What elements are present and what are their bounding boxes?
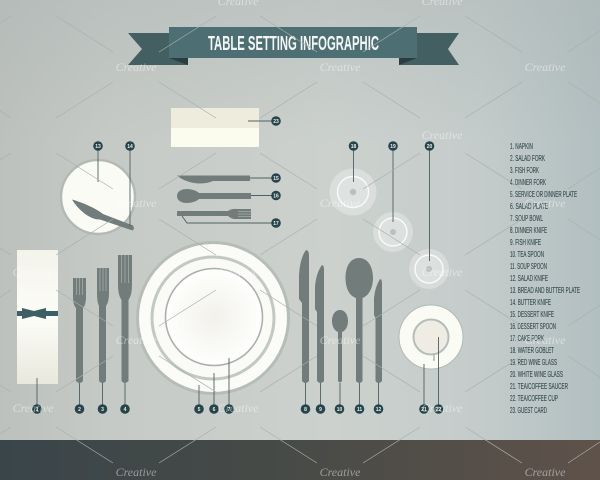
label 7 <box>224 404 234 414</box>
legend list: 10. TEA SPOON <box>510 250 544 259</box>
watermark text: Creative <box>218 401 259 415</box>
dessert cutlery: 16 <box>273 193 279 199</box>
salad fork: 2 <box>78 407 81 413</box>
saucer and cup: 21 <box>421 407 427 413</box>
legend list: 6. SALAD PLATE <box>510 202 548 211</box>
watermark text: Creative <box>320 465 361 479</box>
butter knife leader <box>129 146 131 226</box>
dessert cutlery: 15 <box>273 176 279 182</box>
water goblet <box>330 141 376 216</box>
cup <box>414 320 448 354</box>
cup handle <box>433 354 434 360</box>
label 5 <box>194 404 204 414</box>
watermark text: Creative <box>116 60 157 74</box>
banner main ribbon <box>169 27 417 58</box>
legend list: 8. DINNER KNIFE <box>510 226 547 235</box>
title: TABLE SETTING INFOGRAPHIC <box>208 33 379 55</box>
legend list: 16. DESSERT SPOON <box>510 322 556 331</box>
bread plate <box>61 160 135 234</box>
service plate <box>138 242 288 394</box>
legend list: 19. RED WINE GLASS <box>510 358 557 367</box>
bread and butter plate with butter knife: 14 <box>127 144 133 150</box>
dinner knife: 8 <box>304 407 307 413</box>
fish fork: 3 <box>101 407 104 413</box>
watermark text: Creative <box>116 196 157 210</box>
salad knife: 12 <box>376 407 381 413</box>
plate leaders <box>199 358 229 409</box>
legend list: 11. SOUP SPOON <box>510 262 547 271</box>
cake fork <box>177 209 251 219</box>
white wine glass <box>409 141 449 289</box>
banner folds <box>169 58 417 65</box>
fish knife <box>315 265 325 414</box>
legend list: 2. SALAD FORK <box>510 154 545 163</box>
legend list: 22. TEA/COFFEE CUP <box>510 394 558 403</box>
legend list: 14. BUTTER KNIFE <box>510 298 551 307</box>
title banner <box>128 27 459 65</box>
dessert spoon <box>177 189 251 203</box>
watermark text: Creative <box>218 128 259 142</box>
cup leaders <box>424 337 438 409</box>
watermark text: Creative <box>525 333 566 347</box>
saucer and cup <box>399 305 463 414</box>
watermark text: Creative <box>525 196 566 210</box>
legend list: 9. FISH KNIFE <box>510 238 541 247</box>
watermark text: Creative <box>422 265 463 279</box>
napkin band and bow <box>17 308 58 319</box>
butter knife <box>72 200 134 230</box>
watermark text: Creative <box>320 196 361 210</box>
label 13 <box>93 141 103 151</box>
label 6 <box>209 404 219 414</box>
dinner fork <box>118 255 132 414</box>
saucer <box>399 305 463 369</box>
bread and butter plate with butter knife <box>61 141 135 234</box>
watermark text: Creative <box>320 60 361 74</box>
legend list: 20. WHITE WINE GLASS <box>510 370 563 379</box>
water goblet: 18 <box>351 144 356 150</box>
watermark text: Creative <box>320 333 361 347</box>
bread and butter plate with butter knife: 13 <box>95 144 101 150</box>
legend list: 7. SOUP BOWL <box>510 214 543 223</box>
watermark text: Creative <box>525 465 566 479</box>
watermark text: Creative <box>218 265 259 279</box>
dinner knife <box>299 250 310 414</box>
plate stack: 7 <box>228 407 231 413</box>
red wine glass <box>373 141 413 252</box>
label 22 <box>434 404 443 414</box>
dinner fork: 4 <box>124 407 127 413</box>
watermark text: Creative <box>116 333 157 347</box>
dessert cutlery <box>177 173 281 228</box>
legend list: 18. WATER GOBLET <box>510 346 554 355</box>
soup bowl <box>166 268 262 366</box>
watermark text: Creative <box>13 401 54 415</box>
label 21 <box>419 404 429 414</box>
legend list <box>510 142 580 415</box>
guest card <box>171 108 281 147</box>
white wine glass: 20 <box>427 144 432 150</box>
watermark text: Creative <box>13 265 54 279</box>
napkin <box>17 250 58 414</box>
legend list: 23. GUEST CARD <box>510 406 547 415</box>
dessert cutlery: 17 <box>273 221 279 227</box>
legend list: 17. CAKE FORK <box>510 334 544 343</box>
salad fork <box>73 278 86 414</box>
salad plate <box>152 257 274 379</box>
label 14 <box>125 141 135 151</box>
red wine glass: 19 <box>390 144 396 150</box>
napkin leader <box>36 378 38 409</box>
legend list: 3. FISH FORK <box>510 166 539 175</box>
saucer and cup: 22 <box>436 407 441 413</box>
legend list: 4. DINNER FORK <box>510 178 546 187</box>
watermark text: Creative <box>422 401 463 415</box>
plate stack <box>138 242 288 414</box>
legend list: 15. DESSERT KNIFE <box>510 310 554 319</box>
table edge band <box>0 440 600 480</box>
napkin: 1 <box>36 407 39 413</box>
banner right tail <box>399 33 459 65</box>
plate stack: 6 <box>213 407 216 413</box>
legend list: 1. NAPKIN <box>510 142 533 151</box>
soup spoon <box>346 258 373 414</box>
plate stack: 5 <box>198 407 201 413</box>
watermark text: Creative <box>116 465 157 479</box>
dessert knife <box>177 176 250 183</box>
watermark text: Creative <box>525 60 566 74</box>
banner left tail <box>128 33 188 65</box>
fish knife: 9 <box>319 407 322 413</box>
guest card: 23 <box>273 119 279 125</box>
fish fork <box>97 268 109 414</box>
tea spoon <box>332 310 348 414</box>
soup spoon: 11 <box>357 407 362 413</box>
salad knife <box>374 279 383 414</box>
tea spoon: 10 <box>337 407 342 413</box>
legend list: 12. SALAD KNIFE <box>510 274 548 283</box>
watermark text: Creative <box>422 128 463 142</box>
bread plate leader <box>97 146 99 182</box>
